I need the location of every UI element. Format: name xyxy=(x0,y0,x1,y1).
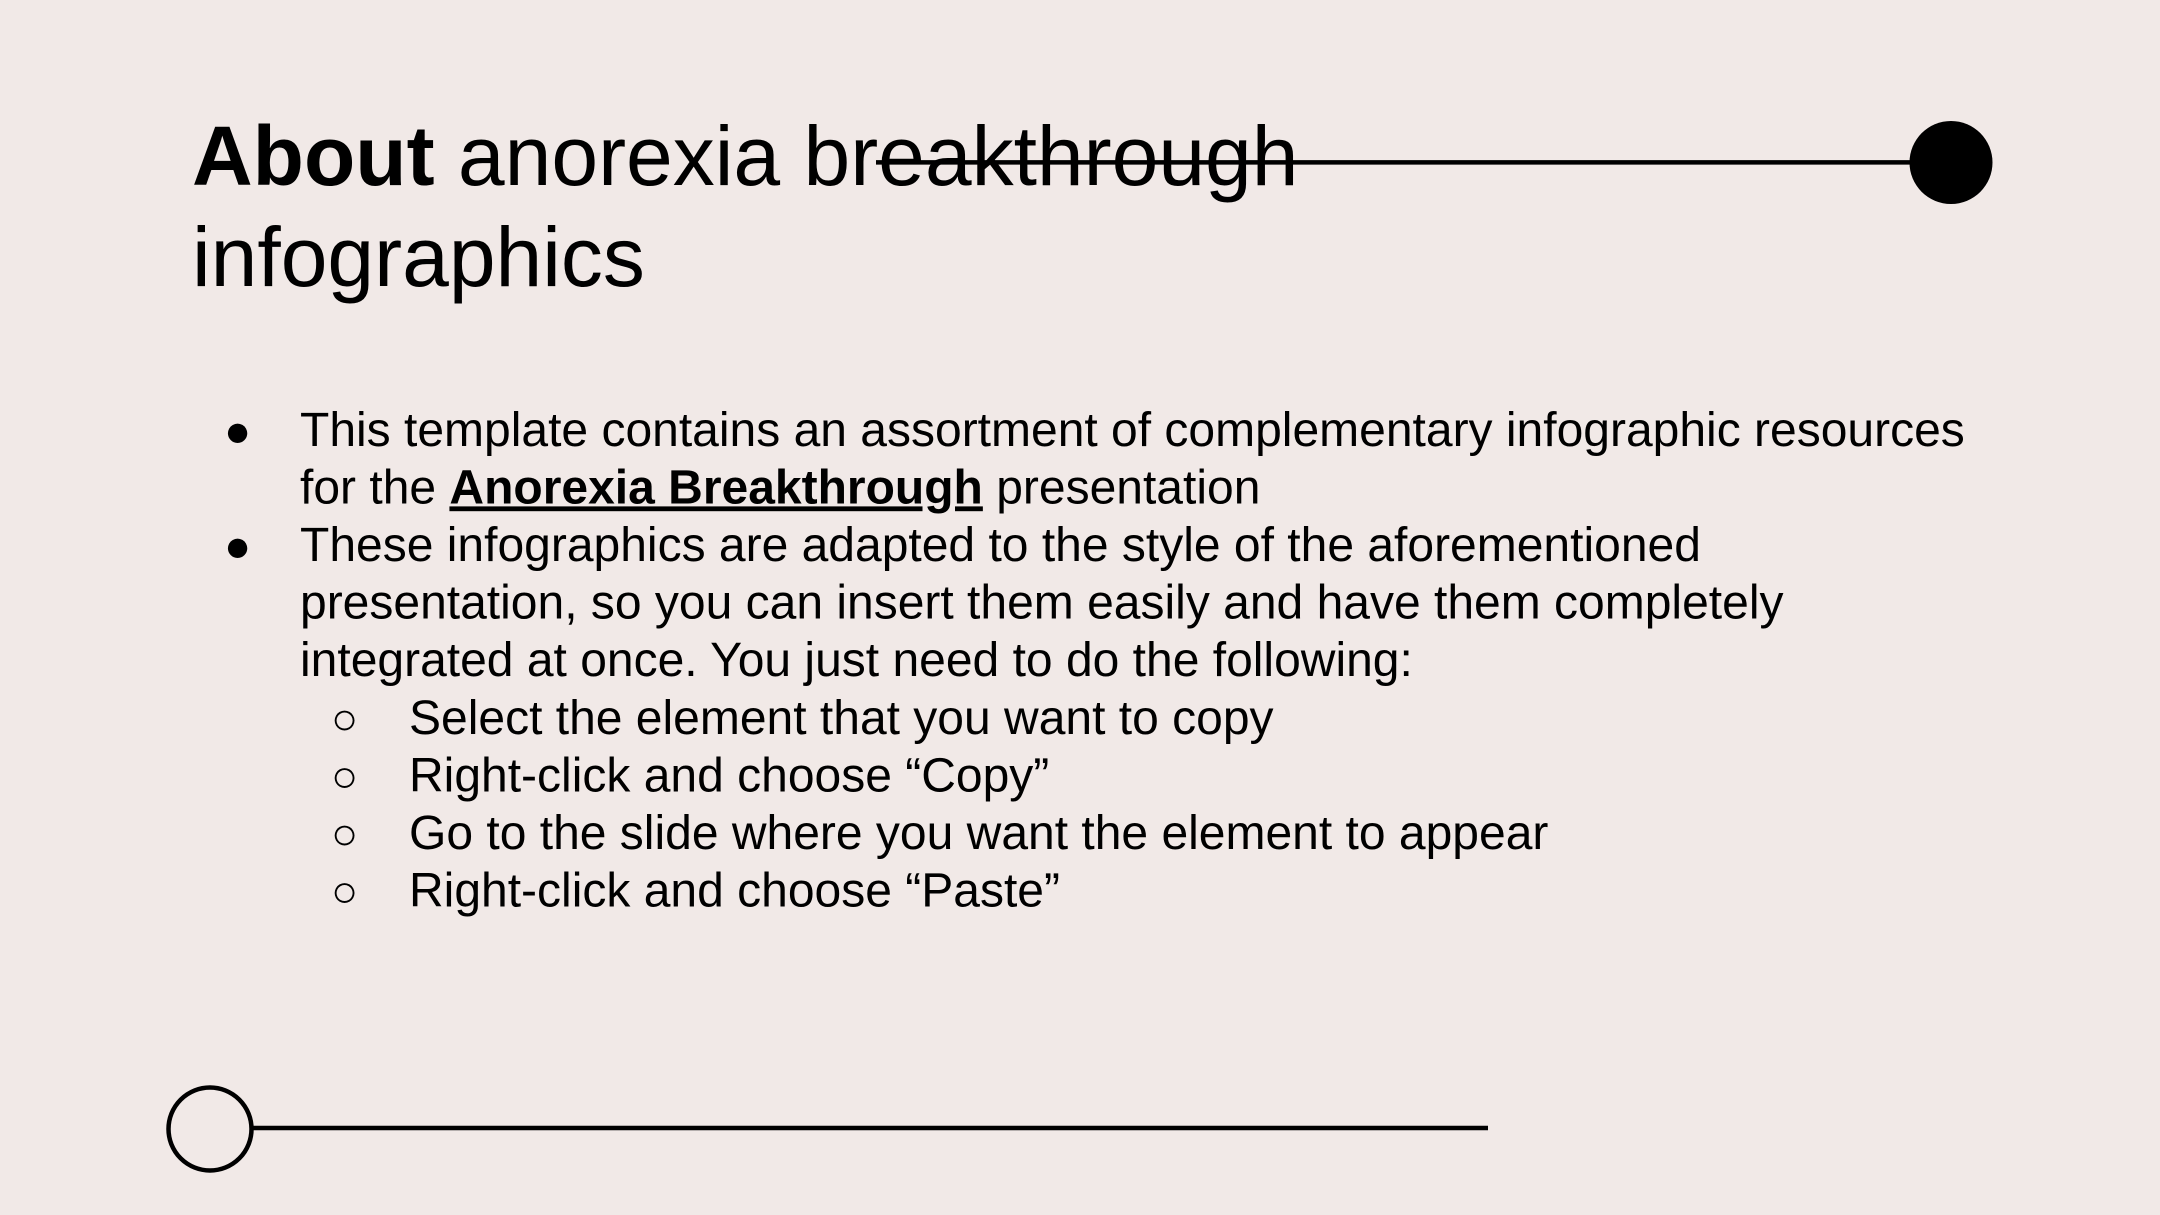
title xyxy=(192,109,1298,304)
sub-steps list: Go to the slide where you want the element to appear xyxy=(409,807,1548,860)
title: infographics xyxy=(192,210,645,304)
sub-steps list: Right-click and choose “Copy” xyxy=(409,749,1049,802)
bullet 1: for the Anorexia Breakthrough presentation xyxy=(300,461,1260,514)
sub-steps list xyxy=(331,692,1548,918)
sub-steps list: ○ xyxy=(331,750,358,801)
bullet 2: These infographics are adapted to the style of the aforementioned xyxy=(300,519,1701,572)
sub-steps list: ○ xyxy=(331,693,358,744)
bullet 2 xyxy=(224,519,1783,687)
bullet 2: ● xyxy=(224,520,251,571)
top decorative connector: line with filled circle xyxy=(876,121,1992,204)
sub-steps list: ○ xyxy=(331,808,358,859)
title: About anorexia breakthrough xyxy=(192,109,1298,203)
bullet 1: This template contains an assortment of complementary infographic resources xyxy=(300,404,1965,457)
bullet 2: integrated at once. You just need to do the following: xyxy=(300,634,1413,687)
bullet 2: presentation, so you can insert them easily and have them completely xyxy=(300,577,1783,630)
bottom decorative connector: outlined circle with line xyxy=(168,1088,1488,1170)
sub-steps list: ○ xyxy=(331,866,358,917)
bullet 1: ● xyxy=(224,405,251,456)
body bullet list xyxy=(224,404,1965,918)
sub-steps list: Right-click and choose “Paste” xyxy=(409,865,1060,918)
bullet 1 xyxy=(224,404,1965,514)
sub-steps list: Select the element that you want to copy xyxy=(409,692,1274,745)
